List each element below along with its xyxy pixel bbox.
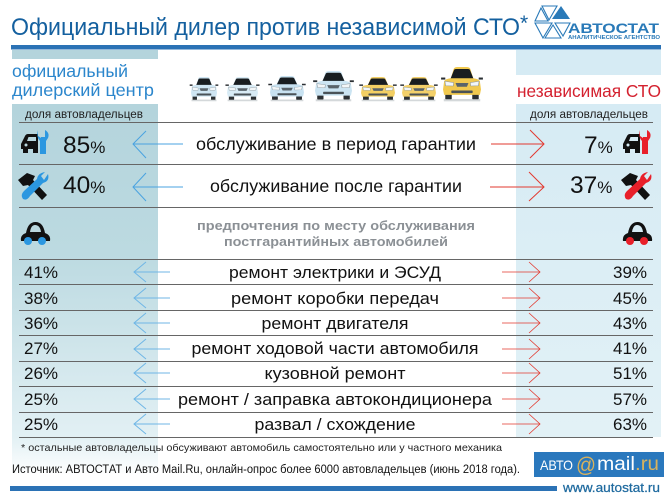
row: electrics: 39% bbox=[613, 263, 647, 282]
arrow: left blue bbox=[133, 131, 183, 158]
website: www.autostat.ru bbox=[562, 480, 660, 495]
title rule bbox=[11, 45, 661, 50]
title asterisk: * bbox=[520, 12, 528, 35]
logo: Авто Mail.ru: @ bbox=[576, 454, 596, 477]
row: bodywork: 51% bbox=[613, 364, 647, 383]
row: engine: 43% bbox=[613, 314, 647, 333]
row: gearbox: 45% bbox=[613, 289, 647, 308]
logo: Автостат bbox=[535, 6, 661, 41]
logo: Авто Mail.ru: mail bbox=[597, 454, 635, 475]
logo: Авто Mail.ru bbox=[534, 452, 664, 477]
left heading: официальный bbox=[12, 61, 128, 81]
row: gearbox: ремонт коробки передач bbox=[231, 290, 439, 308]
logo: Авто Mail.ru: АВТО bbox=[540, 457, 573, 473]
icon: tools, dealer bbox=[18, 172, 48, 200]
row: electrics: ремонт электрики и ЭСУД bbox=[229, 264, 441, 282]
row: air conditioning: 57% bbox=[613, 390, 647, 409]
row: gearbox: 38% bbox=[24, 289, 58, 308]
row: bodywork: кузовной ремонт bbox=[264, 365, 406, 383]
icon: car, service bbox=[623, 222, 652, 245]
row: air conditioning bbox=[24, 389, 647, 409]
row: suspension: ремонт ходовой части автомобиля bbox=[192, 340, 478, 358]
value: 37% bbox=[570, 172, 612, 199]
row: engine: ремонт двигателя bbox=[262, 315, 408, 333]
footnote: * остальные автовладельцы обсуживают автомобиль самостоятельно или у частного механика bbox=[21, 442, 502, 454]
row: gearbox bbox=[24, 288, 647, 308]
arrow: right red bbox=[491, 130, 544, 158]
arrow: right red bbox=[490, 172, 544, 201]
row: engine bbox=[24, 313, 647, 333]
row: electrics: 41% bbox=[24, 263, 58, 282]
icon: tools, service bbox=[621, 172, 651, 200]
table: repair types bbox=[24, 262, 647, 434]
row: air conditioning: 25% bbox=[24, 390, 58, 409]
value: 7% bbox=[584, 132, 613, 159]
subheading: preferences: постгарантийных автомобилей bbox=[224, 234, 448, 249]
value: 40% bbox=[63, 172, 105, 199]
icon: car, dealer bbox=[21, 222, 50, 245]
subheading: preferences: предпочтения по месту обслуживания bbox=[197, 218, 475, 233]
cars illustration bbox=[190, 67, 483, 101]
row: suspension bbox=[24, 339, 647, 359]
source: Источник: АВТОСТАТ и Авто Mail.Ru, онлайн-опрос более 6000 автовладельцев (июнь 2018 года). bbox=[12, 464, 520, 476]
label: обслуживание после гарантии bbox=[210, 176, 462, 196]
row: suspension: 41% bbox=[613, 339, 647, 358]
row: bodywork: 26% bbox=[24, 364, 58, 383]
value: 85% bbox=[63, 132, 105, 159]
panel: right background bbox=[516, 50, 661, 437]
logo: Автостат: АНАЛИТИЧЕСКОЕ АГЕНТСТВО bbox=[568, 35, 661, 41]
row: wheel alignment: 25% bbox=[24, 415, 58, 434]
left heading: дилерский центр bbox=[12, 80, 154, 100]
row: bodywork bbox=[24, 363, 647, 383]
arrow: left blue bbox=[133, 173, 183, 201]
icon: car and wrench, service bbox=[623, 130, 651, 154]
panel: left background bbox=[12, 50, 158, 475]
row: electrics bbox=[24, 262, 647, 282]
row: post-warranty service bbox=[18, 172, 651, 201]
row: engine: 36% bbox=[24, 314, 58, 333]
label: обслуживание в период гарантии bbox=[196, 134, 476, 154]
row: wheel alignment: развал / схождение bbox=[254, 416, 416, 434]
logo: Автостат: АВТОСТАТ bbox=[568, 20, 660, 36]
row: wheel alignment bbox=[24, 414, 647, 434]
row: suspension: 27% bbox=[24, 339, 58, 358]
row: warranty service bbox=[21, 130, 651, 159]
right column label: доля автовладельцев bbox=[530, 109, 648, 121]
row: wheel alignment: 63% bbox=[613, 415, 647, 434]
row: air conditioning: ремонт / заправка автокондиционера bbox=[178, 391, 493, 409]
right heading: независимая СТО bbox=[517, 81, 661, 101]
bottom rule bbox=[10, 486, 557, 491]
icon: car and wrench, dealer bbox=[21, 130, 49, 154]
title: Официальный дилер против независимой СТО bbox=[11, 14, 520, 41]
table rules bbox=[19, 122, 653, 438]
logo: Авто Mail.ru: .ru bbox=[635, 454, 659, 475]
left column label: доля автовладельцев bbox=[25, 109, 143, 121]
